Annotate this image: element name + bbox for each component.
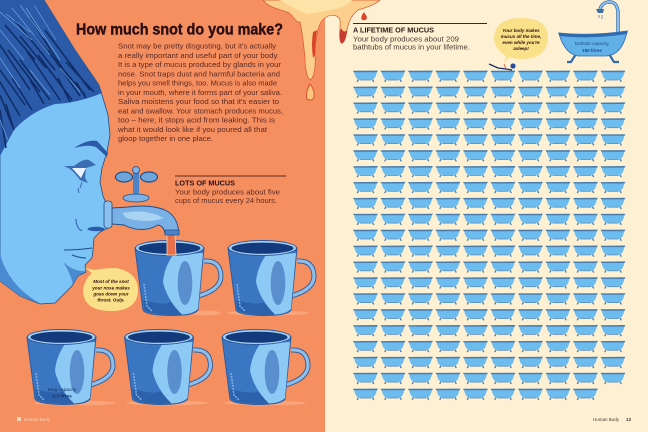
heading: a lifetime of mucus: bathtubs of mucus in your lifetime. <box>353 42 470 52</box>
heading: lots of mucus: cups of mucus every 24 hours. <box>175 196 277 205</box>
footer: right page <box>593 417 632 422</box>
speech bubble: throat: your nose makes <box>91 286 130 290</box>
footer: right page: Human Body <box>593 417 620 422</box>
text block: introduction: too – here, it stops acid from leaking. This is <box>118 116 275 124</box>
speech bubble: throat: Most of the snot <box>93 279 129 284</box>
heading: a lifetime of mucus: Your body produces about 209 <box>353 34 459 44</box>
label: mug capacity <box>48 387 77 400</box>
text block: introduction: gloop together in one place. <box>118 134 213 143</box>
eye <box>64 160 96 193</box>
text block: introduction: helps you smell things, too. Mucus is also made <box>118 78 277 88</box>
snot stream <box>167 234 176 255</box>
label: mug capacity: 0.3 litres <box>52 394 72 400</box>
text block: introduction: nose. Snot traps dust and harmful bacteria and <box>118 69 280 78</box>
text block: introduction: what it would look like if you poured all that <box>117 125 268 134</box>
footer: left page: Human Body <box>24 417 51 422</box>
label: mug capacity: Mug capacity <box>48 387 77 393</box>
speech bubble: throat <box>83 268 138 311</box>
icon: large bathtub with shower <box>558 2 628 62</box>
footer: right page: 13 <box>626 417 632 422</box>
text block: introduction: in your mouth, where it forms part of your saliva. <box>118 88 282 97</box>
text block: introduction: Saliva moistens your food so that it's easier to <box>118 97 279 106</box>
text block: introduction <box>117 42 283 143</box>
mug 1 <box>135 240 221 316</box>
mug 2 <box>228 240 314 316</box>
title: How much snot do you make? <box>76 22 283 38</box>
icon: tap <box>104 166 179 235</box>
speech bubble: throat: goes down your <box>92 292 129 296</box>
speech bubble: asleep <box>494 18 548 64</box>
hair <box>0 0 102 156</box>
text block: introduction: a really important and useful part of your body. <box>118 51 279 60</box>
nose and mouth lines <box>76 219 82 231</box>
text block: introduction: It is a type of mucus produced by glands in your <box>118 60 281 69</box>
speech bubble: asleep: even while you're <box>502 40 540 45</box>
text block: introduction: eat and swallow. Your stomach produces mucus, <box>118 106 283 115</box>
text block: introduction: Snot may be pretty disgusting, but it's actually <box>118 42 276 50</box>
heading: lots of mucus: LOTS OF MUCUS <box>175 180 235 188</box>
icon: large bathtub with shower: 180 litres <box>582 48 602 53</box>
mug shadows <box>34 310 309 406</box>
speech bubble: asleep: Your body makes <box>502 28 540 33</box>
heading: lots of mucus <box>175 176 286 205</box>
mug 5 <box>222 330 308 404</box>
mug 4 <box>124 330 210 404</box>
speech bubble: asleep: asleep! <box>513 46 529 51</box>
mug 3 <box>27 330 113 404</box>
icon: person relaxing in tub <box>489 63 516 70</box>
heading: lots of mucus: Your body produces about five <box>175 188 280 196</box>
speech bubble: throat: throat. Gulp. <box>97 298 125 302</box>
bathtub grid: 209 tubs <box>353 71 625 400</box>
speech bubble: asleep: mucus all the time, <box>501 34 541 39</box>
illustration: snot drip <box>263 0 380 100</box>
heading: a lifetime of mucus: A LIFETIME OF MUCUS <box>353 28 434 34</box>
eyebrow <box>74 141 108 157</box>
illustration: blue face profile <box>0 0 110 304</box>
heading: a lifetime of mucus <box>353 24 487 52</box>
icon: large bathtub with shower: Bathtub capacity <box>575 41 610 46</box>
